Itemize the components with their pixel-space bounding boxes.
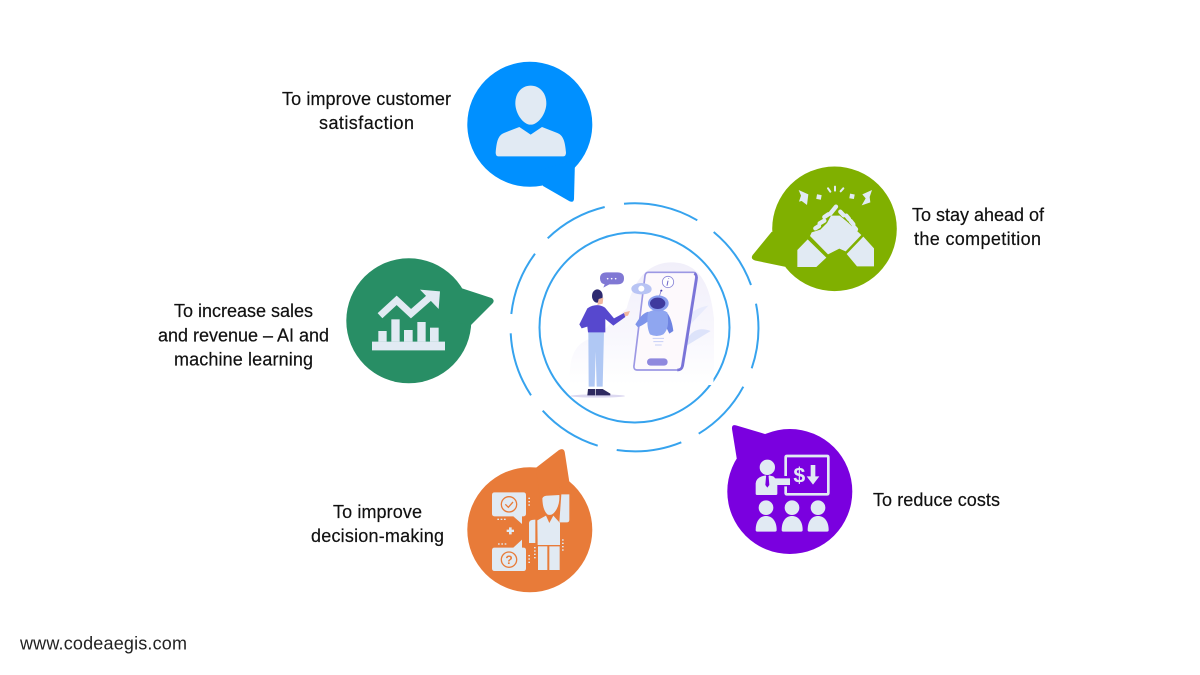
label: sales and revenue: machine learning bbox=[174, 350, 313, 370]
bubble shape bbox=[346, 258, 494, 383]
bubble: customer satisfaction bbox=[467, 62, 592, 202]
bubble: reduce costs bbox=[727, 425, 852, 554]
label: customer satisfaction bbox=[282, 89, 451, 133]
label: decision-making: decision-making bbox=[311, 526, 444, 546]
label: reduce costs: To reduce costs bbox=[873, 490, 1000, 510]
label: sales and revenue: and revenue – AI and bbox=[158, 326, 329, 346]
bubble: decision-making bbox=[467, 449, 592, 592]
label: customer satisfaction: satisfaction bbox=[319, 113, 414, 133]
label: decision-making bbox=[311, 502, 444, 546]
icon: decision making: ? bbox=[505, 553, 513, 567]
label: sales and revenue: To increase sales bbox=[174, 301, 313, 321]
label: customer satisfaction: To improve customer bbox=[282, 89, 451, 109]
label: sales and revenue bbox=[158, 301, 329, 370]
bubble: sales and revenue bbox=[346, 258, 494, 383]
bubble shape bbox=[467, 449, 592, 592]
label: competition: the competition bbox=[914, 229, 1041, 249]
icon: cost presentation: $ bbox=[793, 463, 805, 487]
icon: handshake bbox=[797, 187, 874, 267]
bubble shape bbox=[467, 62, 592, 202]
central illustration: person and robot on phone bbox=[570, 262, 714, 398]
bubble shape bbox=[727, 425, 852, 554]
icon: customer bbox=[496, 86, 566, 156]
bubble shape bbox=[752, 166, 897, 291]
label: decision-making: To improve bbox=[333, 502, 422, 522]
central rings bbox=[511, 203, 758, 451]
bubble: competition bbox=[752, 166, 897, 291]
label: competition bbox=[912, 205, 1045, 249]
label: competition: To stay ahead of bbox=[912, 205, 1045, 225]
icon: decision making bbox=[492, 492, 569, 571]
website footer: www.codeaegis.com bbox=[19, 634, 187, 654]
icon: growth chart bbox=[372, 290, 445, 350]
